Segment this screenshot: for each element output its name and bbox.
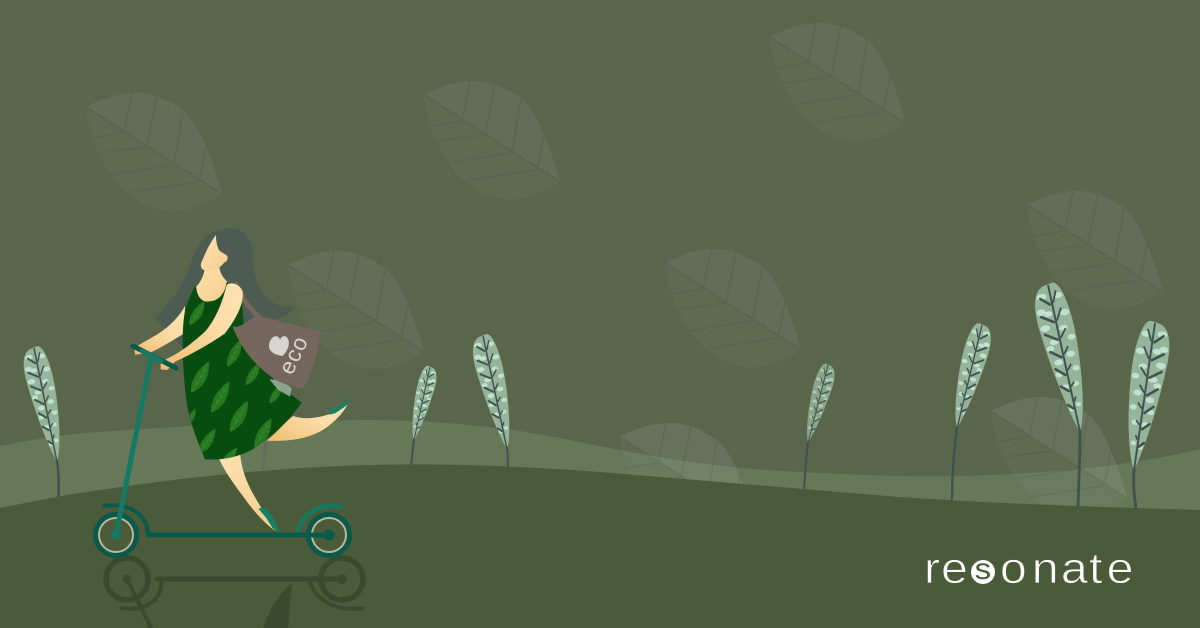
wordmark: s <box>975 551 991 586</box>
plant: centre right <box>799 362 838 491</box>
neck and chest <box>196 267 227 302</box>
front wheel <box>308 514 350 556</box>
rear shoe <box>329 396 353 415</box>
light hill <box>0 420 1200 628</box>
leaf: top centre <box>424 81 560 199</box>
leaf: on hill right <box>991 397 1127 515</box>
dress leaf pattern <box>189 301 281 459</box>
wordmark: onate <box>1000 543 1134 593</box>
stem <box>116 358 151 535</box>
plant: far left <box>20 344 70 497</box>
logo: resonate <box>924 543 1134 593</box>
wordmark: re <box>924 543 968 593</box>
scooter shadow <box>106 558 363 628</box>
plant: far right <box>1118 319 1173 508</box>
front fender <box>298 506 341 533</box>
plant behind rider <box>263 357 296 472</box>
leaf: top left <box>86 93 222 211</box>
eco label: eco <box>273 331 313 378</box>
handlebar <box>133 346 176 368</box>
background leaves <box>86 23 1163 369</box>
hair <box>155 228 294 350</box>
near arm <box>161 283 243 370</box>
bag <box>232 282 321 388</box>
logo mark <box>971 560 995 584</box>
plant: small centre left <box>406 364 439 466</box>
leaf: on hill centre <box>620 423 756 541</box>
front leg <box>219 453 275 531</box>
rider <box>134 228 353 532</box>
rear wheel <box>96 514 136 556</box>
leaf: behind rider <box>288 251 424 369</box>
leaf: top right <box>770 23 906 141</box>
plant glimpse under bag <box>269 379 292 397</box>
leaf: middle <box>665 249 801 367</box>
plant: right small <box>946 321 995 500</box>
scooter <box>96 358 350 556</box>
deck <box>147 532 329 538</box>
back leg <box>267 405 347 441</box>
dress <box>183 282 302 470</box>
front shoe <box>258 507 280 532</box>
plants <box>20 280 1173 508</box>
dark hill <box>0 464 1200 628</box>
plant: centre <box>469 332 520 471</box>
rear fender <box>104 505 148 535</box>
heart icon <box>269 336 289 356</box>
plant: right tall <box>1030 280 1096 506</box>
face <box>201 235 228 271</box>
far arm <box>134 306 185 355</box>
leaf: right <box>1027 191 1163 309</box>
